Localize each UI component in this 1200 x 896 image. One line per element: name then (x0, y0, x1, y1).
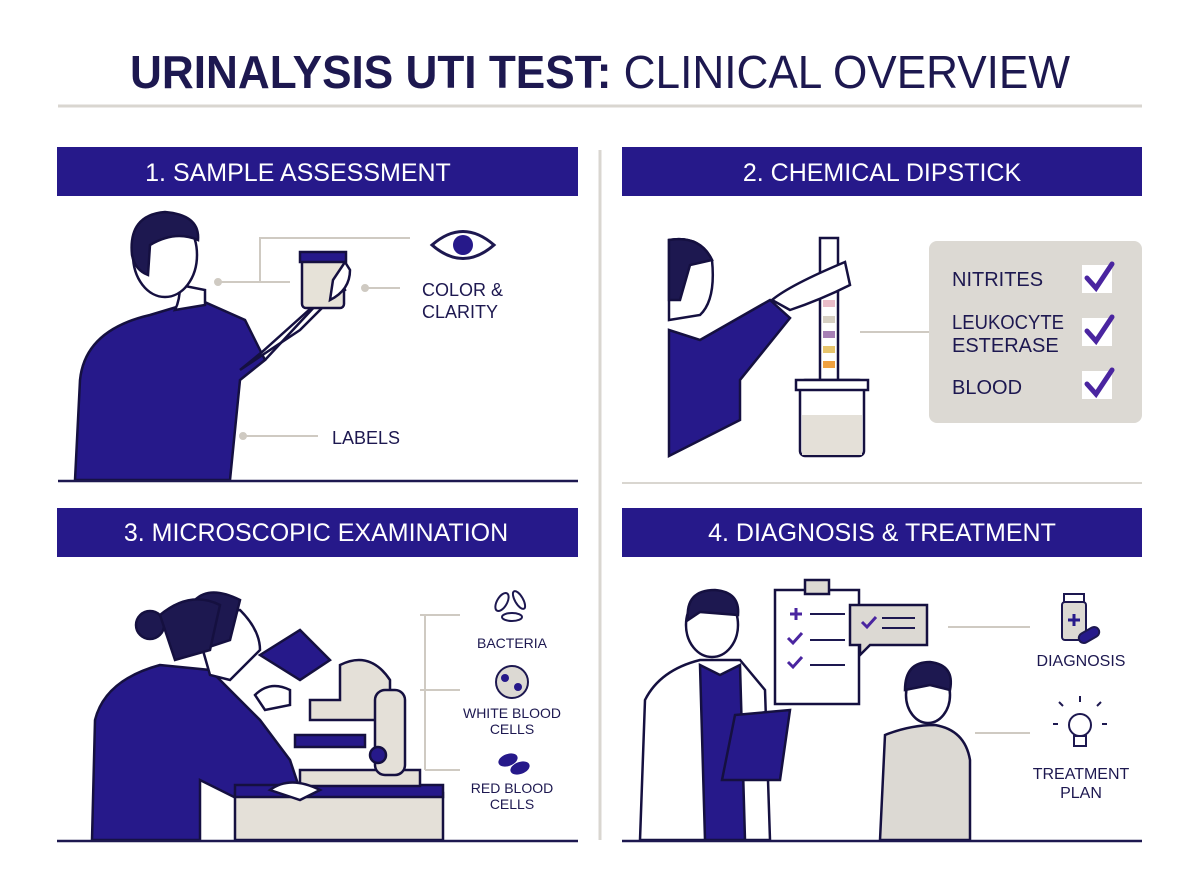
heading 4: 4. DIAGNOSIS & TREATMENT (708, 519, 1056, 547)
heading 3 (57, 508, 578, 557)
results box: NITRITES (952, 269, 1043, 291)
title: URINALYSIS UTI TEST: CLINICAL OVERVIEW (130, 46, 1071, 98)
results box: ESTERASE (952, 335, 1059, 357)
figure: scientist at microscope (92, 592, 443, 840)
callout lines (215, 238, 410, 439)
heading 2: 2. CHEMICAL DIPSTICK (743, 159, 1021, 187)
panel: microscopic examination: WHITE BLOOD (463, 705, 561, 721)
figure: technician holding cup (75, 212, 350, 480)
panel: diagnosis & treatment: PLAN (1060, 785, 1102, 802)
panel: microscopic examination: CELLS (490, 796, 534, 812)
panel: sample assessment (57, 147, 578, 481)
label: labels: LABELS (332, 428, 400, 448)
icon: eye (432, 232, 494, 258)
results box: BLOOD (952, 377, 1022, 399)
panel: chemical dipstick (622, 147, 1142, 456)
panel: diagnosis & treatment: TREATMENT (1033, 766, 1130, 783)
heading 1 (57, 147, 578, 196)
heading 1: 1. SAMPLE ASSESSMENT (145, 159, 451, 187)
results box (929, 241, 1142, 423)
panel: microscopic examination (57, 508, 578, 841)
heading 4 (622, 508, 1142, 557)
icon: bacteria (493, 589, 527, 621)
figure: doctor with tablet (640, 580, 970, 840)
figure: technician with strip (669, 238, 868, 456)
panel: sample assessment: CLARITY (422, 302, 498, 322)
icon: medicine bottle (1062, 594, 1101, 645)
label: color & clarity: COLOR & (422, 280, 503, 300)
icon: lightbulb (1053, 696, 1107, 746)
icon: red blood cells (497, 751, 531, 777)
panel: diagnosis & treatment: DIAGNOSIS (1037, 653, 1125, 670)
panel: microscopic examination: BACTERIA (477, 635, 548, 651)
panel: microscopic examination: CELLS (490, 721, 534, 737)
heading 3: 3. MICROSCOPIC EXAMINATION (124, 519, 508, 547)
results box: LEUKOCYTE (952, 312, 1064, 334)
heading 2 (622, 147, 1142, 196)
panel: diagnosis & treatment (622, 508, 1142, 841)
icon: white blood cell (496, 666, 528, 698)
panel: microscopic examination: RED BLOOD (471, 780, 553, 796)
